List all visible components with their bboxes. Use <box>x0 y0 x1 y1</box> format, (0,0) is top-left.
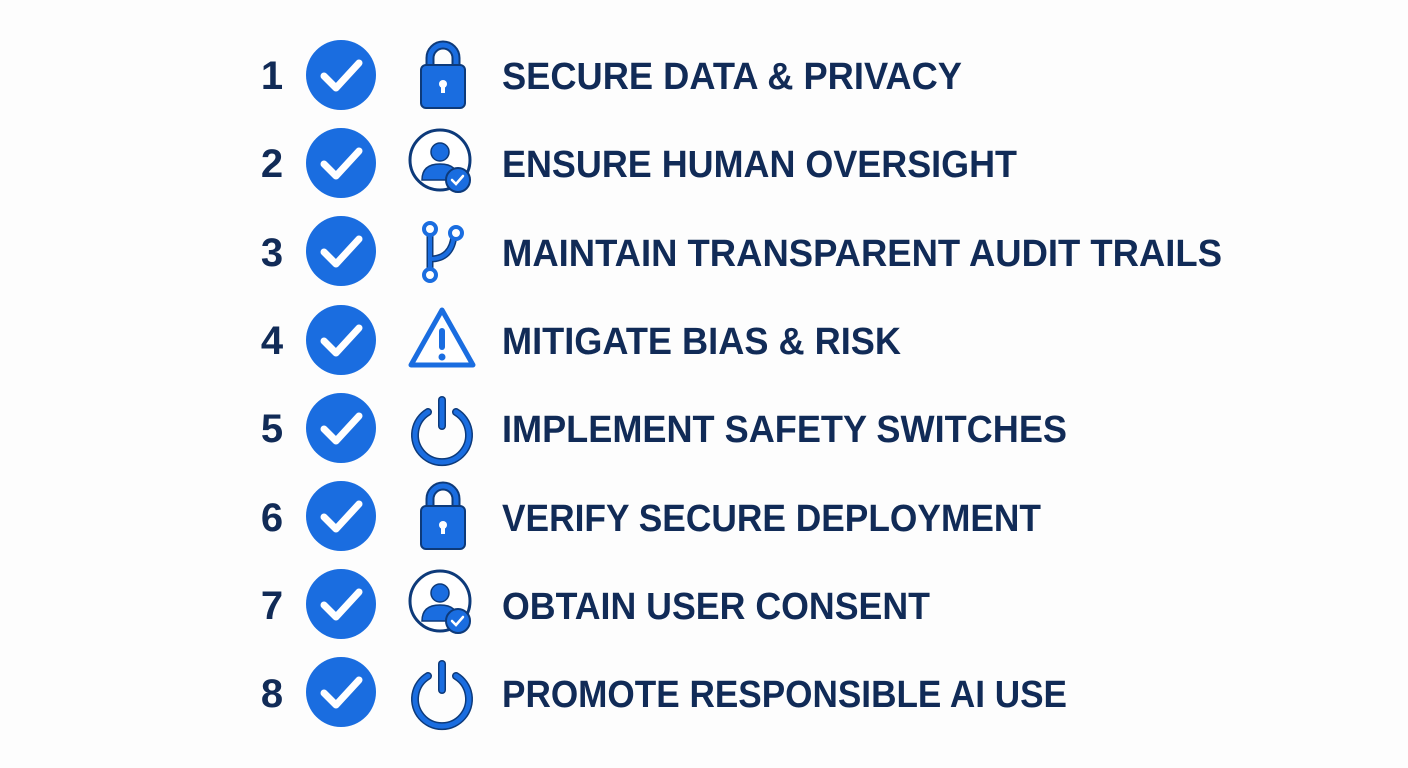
row 2: ENSURE HUMAN OVERSIGHT <box>502 144 1017 186</box>
row 5 <box>261 393 1067 463</box>
row 1: 1 <box>261 54 283 98</box>
row 1 <box>261 40 962 110</box>
row 5: 5 <box>261 407 283 451</box>
row 2 <box>261 128 1017 198</box>
row 7: 7 <box>261 584 283 628</box>
row 4: 4 <box>261 319 284 363</box>
row 5: IMPLEMENT SAFETY SWITCHES <box>502 409 1067 451</box>
row 3: MAINTAIN TRANSPARENT AUDIT TRAILS <box>502 233 1222 275</box>
row 4 <box>261 305 902 375</box>
row 6 <box>261 481 1041 551</box>
row 7 <box>261 569 930 639</box>
row 6: 6 <box>261 496 283 540</box>
row 1: SECURE DATA & PRIVACY <box>502 56 962 98</box>
row 6: VERIFY SECURE DEPLOYMENT <box>502 498 1041 540</box>
row 3: 3 <box>261 231 283 275</box>
row 4: MITIGATE BIAS & RISK <box>502 321 902 363</box>
row 8: PROMOTE RESPONSIBLE AI USE <box>502 674 1067 716</box>
row 8: 8 <box>261 672 283 716</box>
row 7: OBTAIN USER CONSENT <box>502 586 930 628</box>
row 3 <box>261 216 1222 286</box>
row 8 <box>261 657 1067 727</box>
row 2: 2 <box>261 142 283 186</box>
